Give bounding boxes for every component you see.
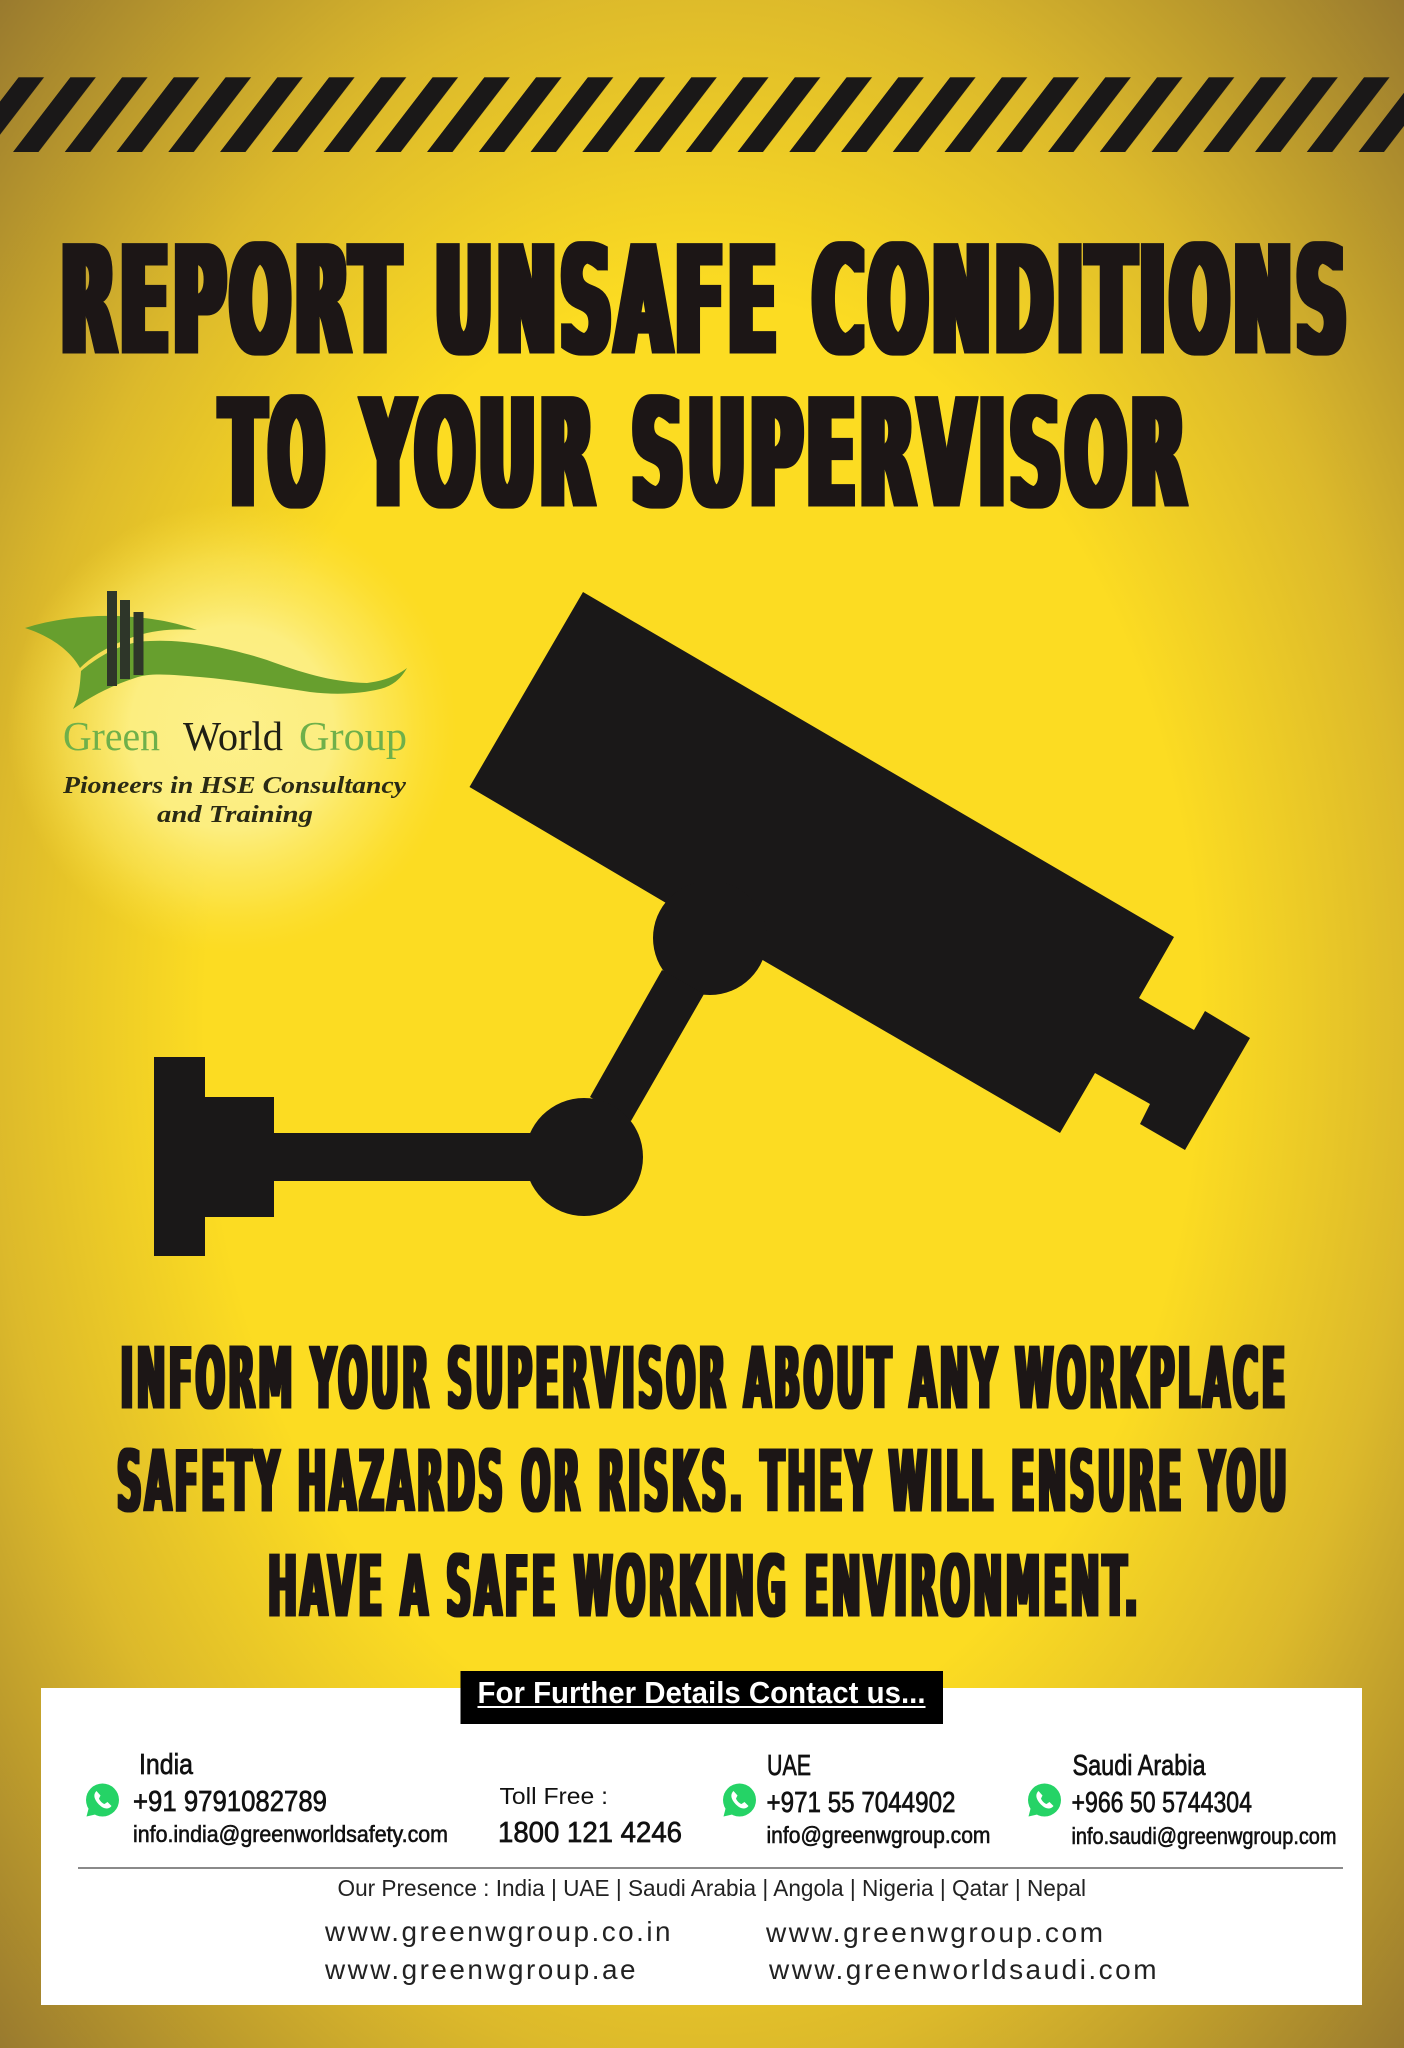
wall mount block: [200, 1097, 274, 1217]
contact: India: [86, 1749, 448, 1847]
logo chimneys: [107, 591, 144, 686]
contact: UAE: +971 55 7044902: [766, 1787, 956, 1819]
logo: Green World Group: [7, 503, 457, 953]
title: YOUR: [362, 368, 598, 542]
website links: www.greenworldsaudi.com: [768, 1954, 1159, 1985]
logo tagline: and Training: [157, 802, 313, 828]
contact banner: For Further Details Contact us...: [478, 1675, 926, 1710]
website links: [324, 1916, 1159, 1985]
title: [61, 215, 1351, 542]
logo name: Green: [63, 713, 160, 759]
divider: [78, 1867, 1343, 1869]
logo name: Group: [299, 713, 407, 759]
contact: UAE: [723, 1750, 990, 1848]
website links: www.greenwgroup.co.in: [324, 1916, 673, 1947]
message text: [117, 1330, 1290, 1637]
title: REPORT: [61, 215, 404, 389]
logo glow: [7, 503, 457, 953]
contact: India: info.india@greenworldsafety.com: [133, 1821, 448, 1847]
arm: [590, 970, 704, 1121]
presence list: Our Presence : India | UAE | Saudi Arabia | Angola | Nigeria | Qatar | Nepal: [338, 1875, 1086, 1901]
contact: Saudi Arabia: +966 50 5744304: [1072, 1787, 1252, 1819]
contact: Saudi Arabia: Saudi Arabia: [1072, 1750, 1206, 1782]
contact: UAE: info@greenwgroup.com: [766, 1822, 990, 1848]
icon: whatsapp: [86, 1784, 119, 1816]
contact: UAE: UAE: [767, 1750, 811, 1782]
upper joint: [653, 881, 767, 995]
title: TO: [221, 368, 328, 542]
icon: whatsapp: [1028, 1784, 1061, 1816]
contact: toll free: 1800 121 4246: [498, 1817, 682, 1849]
contact: India: India: [139, 1749, 194, 1781]
website links: www.greenwgroup.ae: [324, 1954, 638, 1985]
icon: whatsapp: [723, 1784, 756, 1816]
horizontal bar: [270, 1133, 570, 1181]
logo tagline: [62, 773, 406, 828]
logo tagline: Pioneers in HSE Consultancy: [62, 773, 406, 799]
contact: toll free: Toll Free :: [500, 1783, 608, 1809]
icon: security camera: [154, 592, 1250, 1256]
panel: contact card: [41, 1688, 1362, 2005]
website links: www.greenwgroup.com: [765, 1917, 1106, 1948]
title: UNSAFE: [435, 215, 781, 389]
hazard stripe band: [0, 77, 1404, 152]
contact: toll free: [498, 1783, 682, 1849]
logo wing mark: [25, 616, 407, 709]
wall plate: [154, 1057, 205, 1256]
contact: Saudi Arabia: info.saudi@greenwgroup.com: [1072, 1823, 1336, 1849]
lower joint: [525, 1098, 643, 1216]
logo name: World: [183, 713, 283, 759]
contact banner: [460, 1671, 943, 1724]
camera body: [470, 592, 1250, 1150]
contact: India: +91 9791082789: [133, 1786, 327, 1818]
logo name: [63, 713, 407, 759]
contact: Saudi Arabia: [1028, 1750, 1336, 1849]
